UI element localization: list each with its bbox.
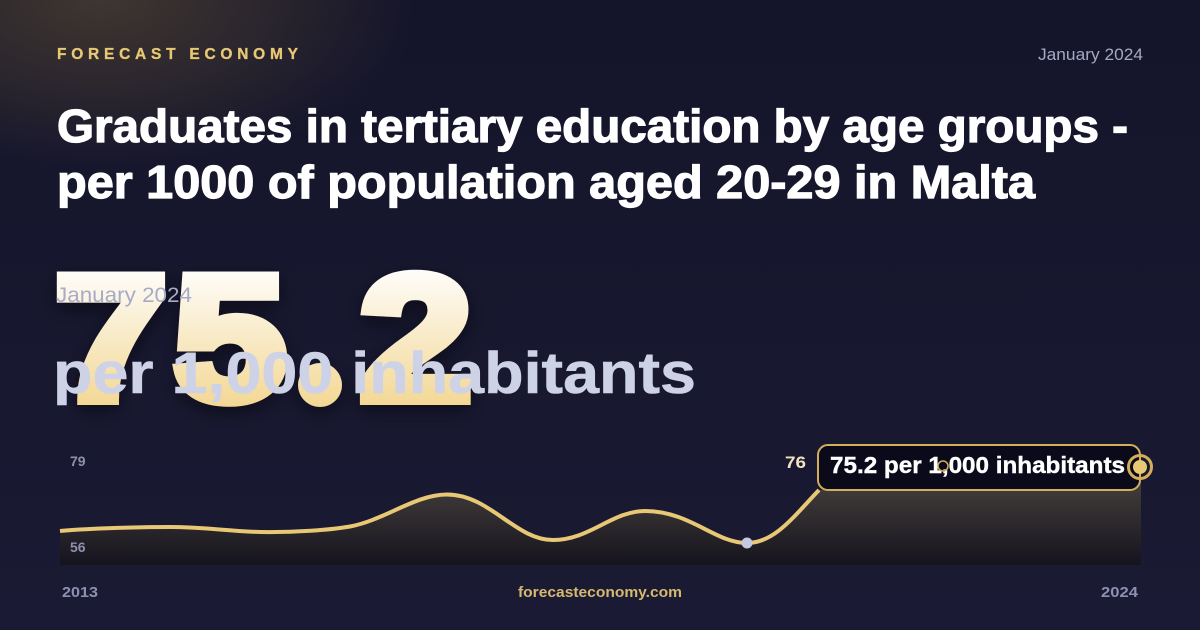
source: forecasteconomy.com [518,584,682,601]
value date: January 2024 [56,284,192,307]
big value: 75.2 [54,239,473,438]
brand label: FORECAST ECONOMY [57,46,299,63]
value unit: per 1,000 inhabitants [53,341,696,406]
title: Graduates in tertiary education by age groups - [57,100,1128,152]
callout: 75.2 per 1,000 inhabitants [830,452,1125,478]
area fill [60,467,1141,565]
callout [818,445,1140,490]
start year: 2013 [62,584,98,601]
min marker [742,538,752,548]
axis min: 56 [70,539,86,555]
axis max: 79 [70,453,86,469]
title: per 1000 of population aged 20-29 in Malta [57,156,1035,208]
end year: 2024 [1101,584,1139,601]
line chart [60,445,1152,565]
date label: January 2024 [1038,46,1143,64]
trend line [60,490,819,543]
end marker [1128,456,1152,478]
title [57,100,1128,208]
point label: 76 [785,453,806,472]
